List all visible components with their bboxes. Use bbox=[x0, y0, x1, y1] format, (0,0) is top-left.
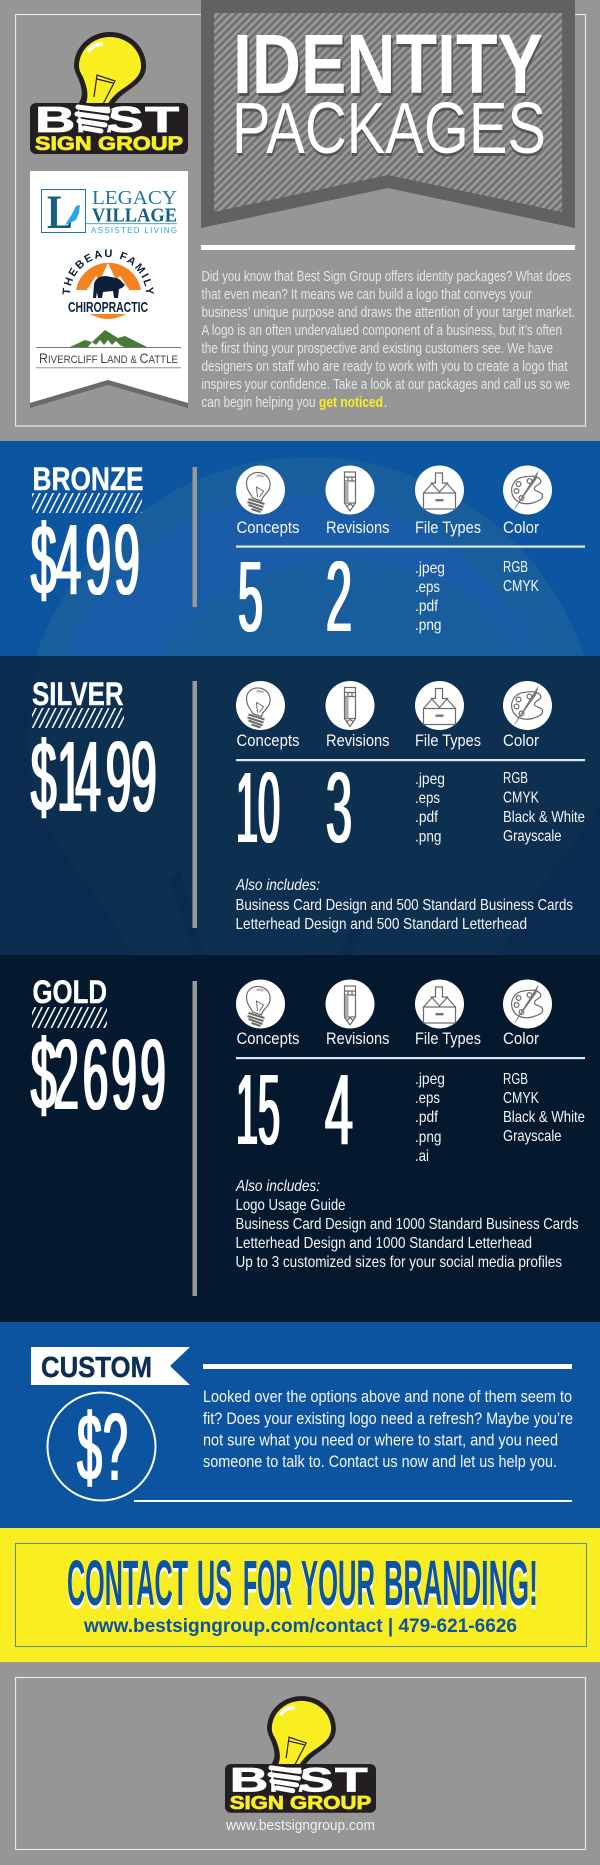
panel: contact call to action bbox=[0, 1528, 600, 1662]
logo: Thebeau Family Chiropractic bbox=[62, 250, 154, 319]
headline shadow: FOR bbox=[243, 1550, 292, 1622]
color list: Black & White bbox=[503, 1109, 585, 1126]
contact headline: FOR bbox=[243, 1547, 292, 1619]
column labels: Color bbox=[503, 518, 539, 537]
custom paragraph: not sure what you need or where to start, and you need bbox=[203, 1432, 558, 1450]
icon: concepts bbox=[236, 466, 285, 514]
icon: file types bbox=[415, 681, 464, 730]
headline shadow bbox=[67, 1550, 538, 1622]
panel: gold package bbox=[0, 955, 600, 1322]
panel: silver package bbox=[0, 656, 600, 955]
logo: Best Sign Group footer: BEST bbox=[230, 1760, 368, 1799]
icon: concepts bbox=[236, 681, 285, 730]
column labels: Revisions bbox=[326, 518, 390, 537]
color list: CMYK bbox=[503, 578, 539, 595]
column labels bbox=[236, 1029, 539, 1048]
column labels: Color bbox=[503, 731, 539, 750]
file types list: .pdf bbox=[415, 809, 438, 826]
column labels: Concepts bbox=[236, 518, 300, 537]
color list: Grayscale bbox=[503, 828, 562, 845]
file types list: .pdf bbox=[415, 598, 438, 615]
file types list: .png bbox=[415, 828, 442, 846]
divider bbox=[192, 981, 197, 1296]
file types list bbox=[415, 771, 445, 846]
column labels: Concepts bbox=[236, 1029, 300, 1048]
icon: color bbox=[503, 980, 552, 1028]
also includes bbox=[235, 1178, 578, 1271]
bronze hatch bbox=[32, 493, 142, 513]
panel: gold package: 15 bbox=[236, 1054, 280, 1166]
rule under title bbox=[201, 245, 575, 250]
bronze heading: BRONZE bbox=[32, 461, 144, 497]
gold heading: GOLD bbox=[32, 974, 107, 1010]
file types list: .png bbox=[415, 617, 442, 634]
icon: revisions bbox=[326, 466, 374, 514]
logo: Best Sign Group bbox=[30, 32, 188, 155]
logo: Best Sign Group footer bbox=[225, 1696, 376, 1813]
panel: silver package: 3 bbox=[326, 752, 352, 864]
icon: revisions bbox=[326, 980, 374, 1028]
custom ribbon: CUSTOM bbox=[41, 1352, 152, 1384]
bronze price: $499 bbox=[31, 505, 140, 616]
divider bbox=[192, 681, 197, 928]
silver heading: SILVER bbox=[32, 676, 124, 712]
column labels: Color bbox=[503, 1029, 539, 1048]
silver price: $1499 bbox=[31, 722, 157, 833]
headline shadow: CONTACT bbox=[67, 1550, 188, 1622]
also includes: Logo Usage Guide bbox=[236, 1197, 346, 1214]
contact headline: US bbox=[197, 1547, 232, 1619]
logo: Best Sign Group: BEST bbox=[35, 99, 180, 140]
intro paragraph: get noticed bbox=[319, 394, 383, 411]
custom price circle bbox=[48, 1392, 156, 1501]
column labels: Revisions bbox=[326, 1029, 390, 1048]
headline shadow: US bbox=[197, 1550, 232, 1622]
custom paragraph bbox=[203, 1388, 573, 1471]
icon: file types bbox=[415, 466, 464, 514]
file types list bbox=[415, 1071, 445, 1165]
column labels: File Types bbox=[415, 731, 481, 750]
color list: RGB bbox=[503, 770, 528, 787]
header white frame bbox=[16, 14, 586, 426]
logo: Best Sign Group: SIGN GROUP bbox=[35, 134, 183, 155]
panel: footer bbox=[0, 1662, 600, 1865]
file types list: .png bbox=[415, 1129, 442, 1146]
color list: RGB bbox=[503, 559, 528, 576]
color list: CMYK bbox=[503, 790, 539, 806]
logo: Thebeau Family Chiropractic: CHIROPRACTIC bbox=[68, 299, 148, 316]
color list: RGB bbox=[503, 1071, 528, 1088]
intro paragraph: can begin helping you bbox=[202, 394, 316, 411]
also includes bbox=[235, 877, 573, 933]
logo: Legacy Village: LEGACY bbox=[92, 187, 177, 209]
panel: silver package: 10 bbox=[236, 752, 280, 864]
revisions number: 4 bbox=[325, 1054, 353, 1166]
client logos ribbon bbox=[30, 171, 188, 408]
file types list: .jpeg bbox=[415, 1071, 445, 1088]
gold hatch bbox=[32, 1007, 107, 1028]
also includes: Also includes: bbox=[235, 877, 320, 894]
file types list: .eps bbox=[415, 579, 440, 596]
file types list bbox=[415, 560, 445, 634]
color list: Black & White bbox=[503, 809, 585, 826]
logo: Thebeau Family Chiropractic: THEBEAU FAMILY bbox=[62, 250, 154, 294]
logo: Best Sign Group footer: SIGN GROUP bbox=[230, 1793, 371, 1813]
logo: Legacy Village: VILLAGE bbox=[92, 204, 177, 226]
intro paragraph: . bbox=[384, 394, 388, 411]
custom price circle: $? bbox=[77, 1393, 128, 1501]
column labels: Revisions bbox=[326, 731, 390, 750]
file types list: .eps bbox=[415, 1090, 440, 1107]
column labels: File Types bbox=[415, 518, 481, 537]
column labels bbox=[236, 731, 539, 750]
icon: color bbox=[503, 466, 552, 514]
also includes: Also includes: bbox=[235, 1178, 320, 1195]
contact headline bbox=[67, 1547, 538, 1619]
custom paragraph: someone to talk to. Contact us now and let us help you. bbox=[203, 1453, 557, 1471]
logo: Rivercliff Land & Cattle: RIVERCLIFF LAND & CATTLE bbox=[39, 350, 178, 366]
also includes: Letterhead Design and 1000 Standard Letterhead bbox=[236, 1235, 532, 1252]
logo: Rivercliff Land & Cattle bbox=[36, 330, 181, 368]
logo: Legacy Village: L bbox=[47, 186, 73, 239]
panel: custom package bbox=[0, 1322, 600, 1528]
file types list: .ai bbox=[415, 1148, 429, 1165]
color list bbox=[503, 559, 539, 595]
color list: Grayscale bbox=[503, 1128, 562, 1145]
color list bbox=[503, 770, 585, 845]
icon: concepts bbox=[236, 980, 285, 1028]
file types list: .jpeg bbox=[415, 771, 445, 788]
panel: bronze package: 2 bbox=[326, 541, 352, 653]
custom ribbon bbox=[31, 1347, 190, 1385]
panel: bronze package bbox=[0, 441, 600, 656]
contact details: www.bestsigngroup.com/contact | 479-621-6626 bbox=[83, 1616, 517, 1637]
file types list: .jpeg bbox=[415, 560, 445, 577]
color list bbox=[503, 1071, 585, 1145]
file types list: .eps bbox=[415, 790, 440, 807]
column labels bbox=[236, 518, 539, 537]
contact headline: CONTACT bbox=[67, 1547, 188, 1619]
contact headline: YOUR bbox=[301, 1547, 375, 1619]
color list: CMYK bbox=[503, 1090, 539, 1107]
also includes: Letterhead Design and 500 Standard Letterhead bbox=[236, 916, 527, 933]
logo: Legacy Village: ASSISTED LIVING bbox=[91, 226, 177, 235]
icon: file types bbox=[415, 980, 464, 1028]
divider bbox=[192, 467, 197, 607]
logo: Legacy Village bbox=[42, 186, 177, 239]
gold price: $2699 bbox=[31, 1020, 166, 1131]
custom top rule bbox=[203, 1364, 572, 1369]
title banner bbox=[201, 0, 575, 228]
custom bottom rule bbox=[134, 1500, 572, 1502]
icon: revisions bbox=[326, 681, 374, 730]
column labels: File Types bbox=[415, 1029, 481, 1048]
intro paragraph bbox=[202, 268, 575, 411]
headline shadow: YOUR bbox=[301, 1550, 375, 1622]
column labels: Concepts bbox=[236, 731, 300, 750]
silver hatch bbox=[32, 708, 124, 728]
panel: header bbox=[14, 0, 586, 427]
file types list: .pdf bbox=[415, 1109, 438, 1126]
panel: bronze package: 5 bbox=[238, 541, 263, 653]
footer website: www.bestsigngroup.com bbox=[225, 1817, 375, 1834]
icon: color bbox=[503, 681, 552, 730]
